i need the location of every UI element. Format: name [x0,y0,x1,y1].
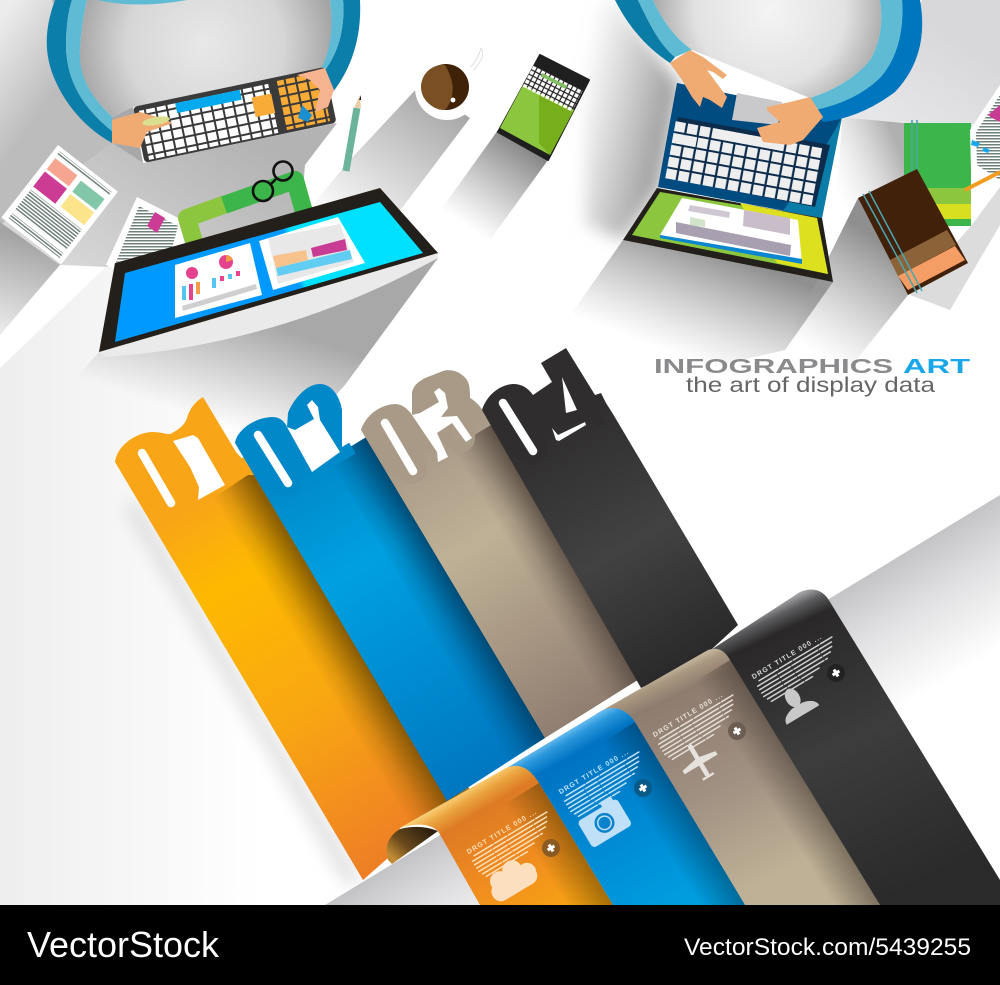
lower paper sheet [325,495,1000,905]
panel 1 plus button [539,836,563,860]
monitor document one [175,243,262,318]
number 02: 0 [222,395,325,525]
panel 4 dark person [700,590,1000,905]
panel 2 plus button [631,776,655,800]
footer bar [0,905,1000,985]
panel 1 heading: DRGT TITLE 000 ... [466,809,539,856]
panel 2 blue camera [500,708,745,926]
right paper [970,85,1000,187]
panel 4 plus button [824,661,848,685]
panel 4 heading: DRGT TITLE 000 ... [751,634,824,681]
curl opening [386,827,438,864]
title [654,356,970,378]
number 04: 4 [527,335,623,460]
band 02 blue [222,368,545,801]
number 01: 0 [106,414,209,544]
brown notebook [858,169,968,295]
soft shadow beside orange band [125,500,363,885]
laptop [615,0,922,282]
left person: arms circle [47,0,360,143]
panel 3 heading: DRGT TITLE 000 ... [652,692,725,739]
number 03: 0 [348,383,451,513]
smartphone [498,55,589,160]
title: INFOGRAPHICS [654,356,893,378]
glasses [253,162,292,201]
number 02: 2 [276,368,370,492]
number 01: 1 [169,382,263,506]
number 02 [222,368,370,525]
monitor document two [259,217,365,290]
icon: camera [574,794,632,848]
subtitle: the art of display data [686,374,935,397]
footer image id: VectorStock.com/5439255 [684,934,971,961]
number 03: 3 [401,356,495,480]
pencil [346,95,361,171]
icon: cloud [481,851,542,905]
title: ART [903,356,970,378]
laptop hands [670,50,823,145]
number 03 [348,356,495,513]
coffee cup [415,48,483,120]
keyboard with hands [112,67,337,163]
footer logo: VectorStock [27,924,220,965]
long shadows [0,0,1000,445]
band 03 taupe [348,356,641,738]
laptop screen [623,188,833,282]
panel 3 taupe plane [596,649,880,926]
orange pencil [965,172,1000,190]
icon: person [771,679,819,725]
number 04 [467,335,623,493]
panel 3 plus button [725,719,749,743]
laptop arms [615,0,922,122]
tablet monitor [99,188,438,357]
band 04 dark [467,335,738,688]
trackpad [732,93,782,125]
panel 1 orange cloud [386,766,613,926]
monitor stand [187,180,304,245]
icon: plane [673,735,725,787]
number 04: 0 [467,363,570,493]
band 01 orange [106,382,470,880]
paper one [1,145,118,264]
green notebook [904,120,971,226]
number 01 [106,382,263,544]
paper two [106,197,190,270]
panel 2 heading: DRGT TITLE 000 ... [558,749,631,796]
